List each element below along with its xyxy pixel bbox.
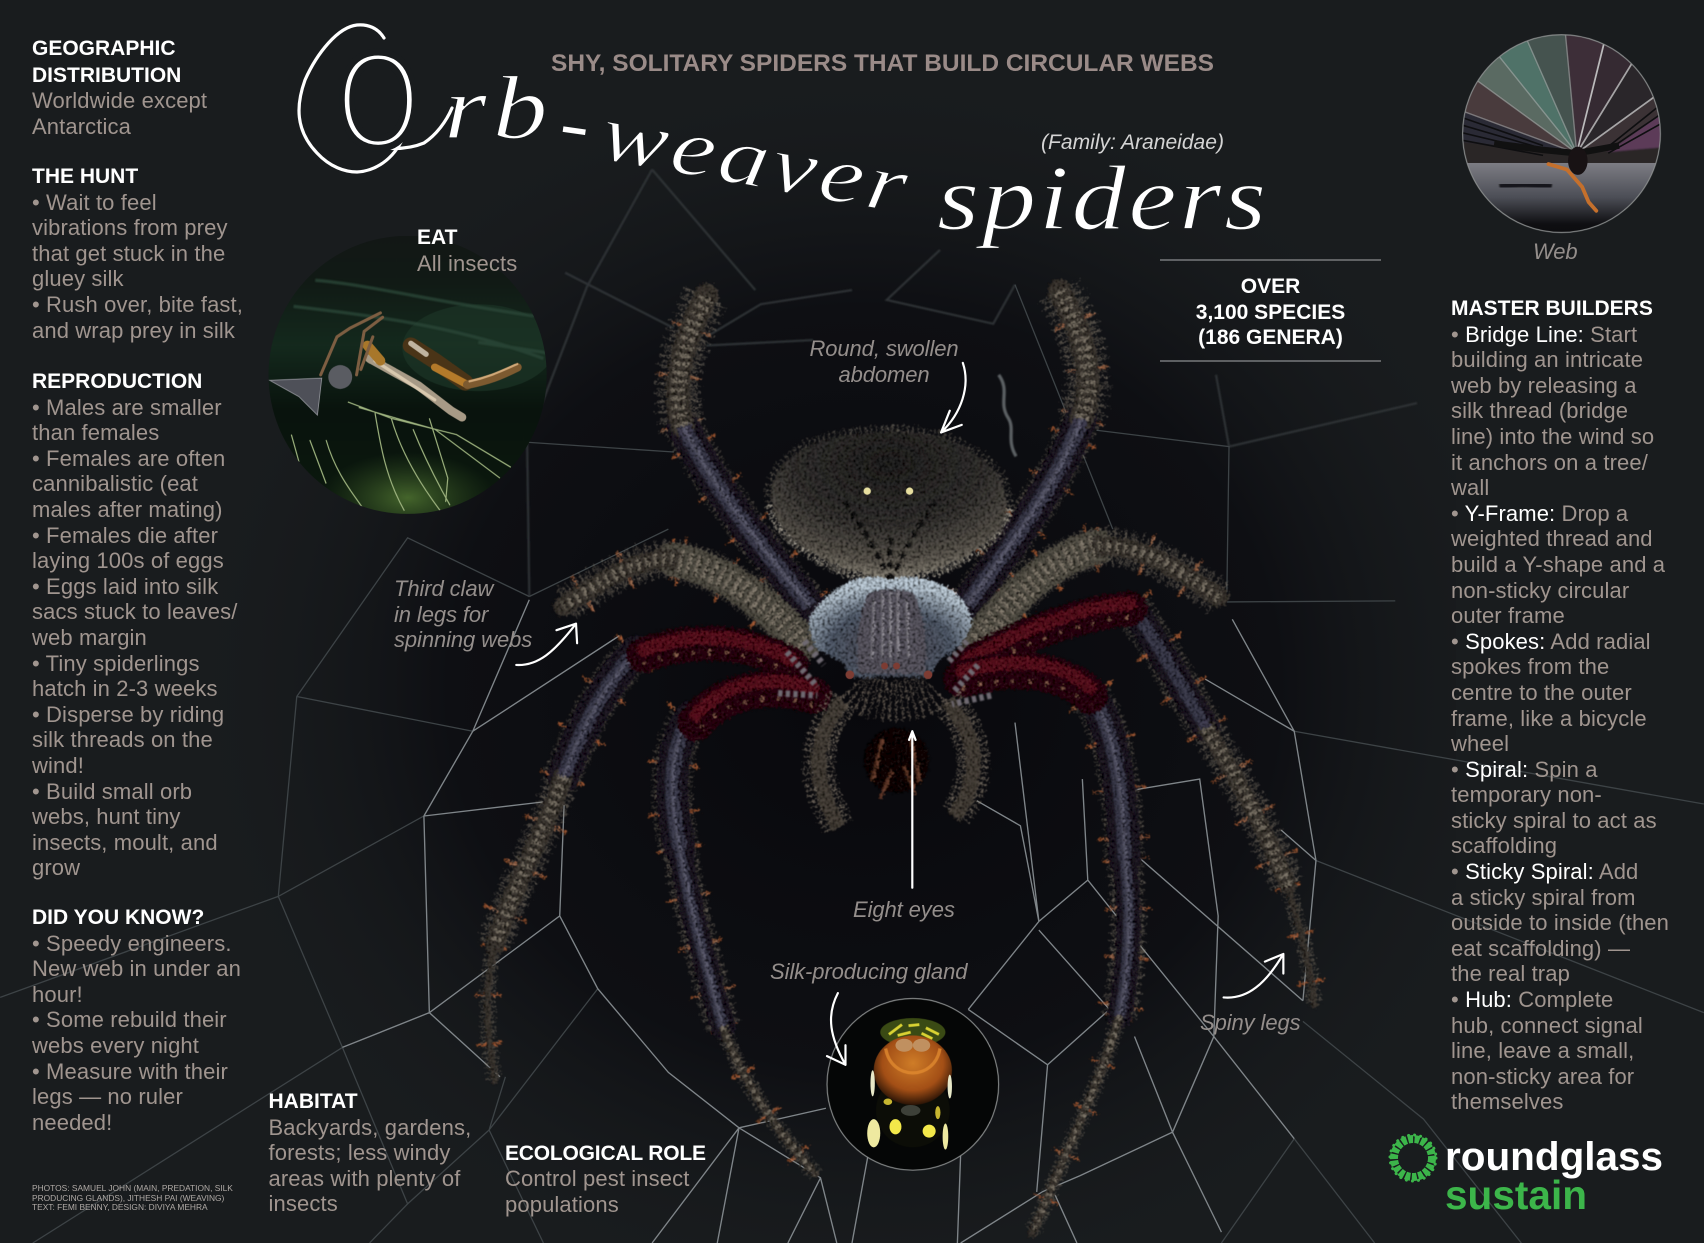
text: master builders: weighted thread and bbox=[1451, 526, 1653, 551]
text: did you know: DID YOU KNOW? bbox=[32, 906, 204, 929]
inset photo: web bbox=[1463, 35, 1660, 232]
text: master builders: a sticky spiral from bbox=[1451, 885, 1636, 910]
text: reproduction: males after mating) bbox=[32, 497, 223, 522]
caption: abdomen: abdomen bbox=[838, 362, 930, 387]
text: master builders: web by releasing a bbox=[1451, 373, 1637, 398]
text: reproduction: • Eggs laid into silk bbox=[32, 574, 218, 599]
abdomen bbox=[770, 432, 1007, 580]
text: master builders: sticky spiral to act as bbox=[1451, 808, 1657, 833]
text: credits bbox=[32, 1183, 233, 1212]
text: reproduction: REPRODUCTION bbox=[32, 370, 202, 393]
text: master builders: line, leave a small, bbox=[1451, 1038, 1634, 1063]
logo: roundglass sustain: roundglass bbox=[1445, 1135, 1663, 1179]
insect prey and spider bbox=[270, 313, 517, 417]
arrow: spiny legs bbox=[1224, 954, 1283, 998]
text: reproduction: • Females die after bbox=[32, 523, 218, 548]
text: geographic distribution: GEOGRAPHIC bbox=[32, 37, 176, 60]
text: master builders: building an intricate bbox=[1451, 347, 1643, 372]
text: species count: (186 GENERA) bbox=[1198, 326, 1343, 349]
text: master builders: hub, connect signal bbox=[1451, 1013, 1643, 1038]
inset photo: silk-producing gland bbox=[827, 999, 999, 1170]
front eyes bbox=[845, 663, 932, 679]
text: geographic distribution: Worldwide except bbox=[32, 88, 207, 113]
text: ecological role: Control pest insect bbox=[505, 1166, 689, 1191]
caption: third claw: Third claw bbox=[394, 576, 493, 601]
species count rules bbox=[1160, 260, 1381, 361]
text: master builders: it anchors on a tree/ bbox=[1451, 450, 1648, 475]
text: master builders: centre to the outer bbox=[1451, 680, 1632, 705]
text: reproduction: • Females are often bbox=[32, 446, 225, 471]
text: credits: PRODUCING GLANDS), JITHESH PAI (WEAVING) bbox=[32, 1193, 224, 1203]
spider bbox=[488, 291, 1315, 1233]
leg joints bbox=[778, 641, 991, 704]
text: master builders: eat scaffolding) — bbox=[1451, 936, 1630, 961]
text: did you know: webs every night bbox=[32, 1033, 199, 1058]
caption: abdomen bbox=[809, 336, 959, 387]
abdomen eye-spots bbox=[864, 487, 913, 495]
title: Orb-weaver spiders: weaver bbox=[595, 86, 915, 231]
text: reproduction: laying 100s of eggs bbox=[32, 548, 224, 573]
palps and fangs bbox=[819, 687, 974, 828]
text: master builders: wheel bbox=[1451, 731, 1509, 756]
text: reproduction: wind! bbox=[32, 753, 84, 778]
text: eat: EAT bbox=[417, 226, 457, 249]
logo: roundglass sustain bbox=[1390, 1135, 1663, 1218]
text: reproduction: • Tiny spiderlings bbox=[32, 651, 200, 676]
text: master builders: line) into the wind so bbox=[1451, 424, 1654, 449]
text: eat: All insects bbox=[417, 251, 517, 276]
arrow: silk gland bbox=[827, 993, 845, 1065]
text: habitat: HABITAT bbox=[268, 1090, 358, 1113]
text: reproduction: • Build small orb bbox=[32, 778, 192, 804]
text: reproduction: cannibalistic (eat bbox=[32, 471, 198, 496]
text: reproduction: than females bbox=[32, 420, 159, 445]
family name: (Family: Araneidae) bbox=[1041, 131, 1224, 154]
arrow: eight eyes bbox=[909, 731, 916, 888]
text: master builders: • Y-Frame: Drop a bbox=[1451, 501, 1628, 526]
logo ring bbox=[1390, 1135, 1436, 1181]
text: master builders: the real trap bbox=[1451, 961, 1570, 986]
text: habitat: forests; less windy bbox=[268, 1140, 451, 1165]
text: ecological role: populations bbox=[505, 1192, 619, 1217]
text: the hunt: gluey silk bbox=[32, 266, 124, 291]
text: master builders: MASTER BUILDERS bbox=[1451, 297, 1653, 320]
text: master builders: • Spokes: Add radial bbox=[1451, 629, 1651, 654]
text: master builders: outside to inside (then bbox=[1451, 910, 1669, 935]
title: Orb-weaver spiders bbox=[299, 24, 1266, 249]
text: reproduction: • Males are smaller bbox=[32, 395, 222, 420]
text: reproduction: silk threads on the bbox=[32, 727, 213, 752]
text: reproduction: hatch in 2-3 weeks bbox=[32, 676, 218, 701]
text: geographic distribution: Antarctica bbox=[32, 114, 131, 139]
text: reproduction: webs, hunt tiny bbox=[32, 804, 181, 829]
prey web strands bbox=[291, 402, 511, 511]
title: Orb-weaver spiders: - bbox=[553, 69, 598, 174]
text: master builders: non-sticky area for bbox=[1451, 1064, 1634, 1089]
text: eat bbox=[417, 226, 517, 276]
text: the hunt: • Wait to feel bbox=[32, 190, 157, 215]
caption: third claw: in legs for bbox=[394, 602, 488, 627]
text: the hunt: and wrap prey in silk bbox=[32, 318, 235, 343]
text: the hunt: • Rush over, bite fast, bbox=[32, 292, 243, 317]
text: master builders: spokes from the bbox=[1451, 654, 1609, 679]
text: credits: PHOTOS: SAMUEL JOHN (MAIN, PREDATION, SILK bbox=[32, 1183, 233, 1193]
caption: third claw: spinning webs bbox=[394, 627, 532, 652]
subtitle: SHY, SOLITARY SPIDERS THAT BUILD CIRCULAR WEBS bbox=[551, 50, 1214, 77]
text: reproduction: sacs stuck to leaves/ bbox=[32, 599, 238, 624]
arrow: third claw bbox=[516, 624, 577, 665]
caption: eight eyes: Eight eyes bbox=[853, 897, 955, 922]
text: the hunt: that get stuck in the bbox=[32, 241, 225, 266]
text: did you know: • Some rebuild their bbox=[32, 1007, 227, 1032]
text: reproduction: grow bbox=[32, 855, 80, 880]
title: Orb-weaver spiders: O bbox=[337, 24, 420, 176]
text: master builders: build a Y-shape and a bbox=[1451, 552, 1665, 577]
arrow: abdomen bbox=[941, 363, 966, 432]
inset photo: predation bbox=[268, 236, 546, 514]
text: the hunt bbox=[32, 165, 243, 343]
text: reproduction: insects, moult, and bbox=[32, 830, 218, 855]
spider legs bbox=[488, 291, 1315, 1233]
text: habitat: areas with plenty of bbox=[268, 1166, 460, 1191]
text: master builders: • Spiral: Spin a bbox=[1451, 757, 1598, 782]
text: did you know bbox=[32, 906, 241, 1135]
text: master builders: non-sticky circular bbox=[1451, 578, 1629, 603]
text: reproduction: web margin bbox=[32, 625, 147, 650]
text: master builders: temporary non- bbox=[1451, 782, 1602, 807]
text: the hunt: vibrations from prey bbox=[32, 215, 228, 240]
text: species count: 3,100 SPECIES bbox=[1196, 301, 1345, 324]
caption: silk gland: Silk-producing gland bbox=[770, 959, 967, 984]
text: did you know: needed! bbox=[32, 1110, 112, 1135]
text: the hunt: THE HUNT bbox=[32, 165, 138, 188]
caption: web: Web bbox=[1533, 239, 1578, 264]
text: master builders: silk thread (bridge bbox=[1451, 398, 1628, 423]
text: credits: TEXT: FEMI BENNY, DESIGN: DIVIYA MEHRA bbox=[32, 1202, 208, 1212]
text: master builders: • Sticky Spiral: Add bbox=[1451, 859, 1638, 884]
text: species count: OVER bbox=[1241, 275, 1300, 298]
text: master builders: wall bbox=[1451, 475, 1489, 500]
caption: abdomen: Round, swollen bbox=[809, 336, 959, 361]
text: did you know: legs — no ruler bbox=[32, 1084, 183, 1109]
text: ecological role: ECOLOGICAL ROLE bbox=[505, 1142, 706, 1164]
text: did you know: hour! bbox=[32, 982, 83, 1007]
text: reproduction bbox=[32, 370, 238, 880]
text: master builders: scaffolding bbox=[1451, 833, 1557, 858]
text: did you know: • Speedy engineers. bbox=[32, 931, 232, 956]
text: geographic distribution bbox=[32, 37, 207, 139]
text: habitat: Backyards, gardens, bbox=[268, 1115, 471, 1140]
text: master builders: outer frame bbox=[1451, 603, 1565, 628]
text: master builders: frame, like a bicycle bbox=[1451, 706, 1647, 730]
caption: spiny legs: Spiny legs bbox=[1200, 1010, 1301, 1035]
text: master builders: • Hub: Complete bbox=[1451, 987, 1613, 1012]
text: master builders: themselves bbox=[1451, 1089, 1563, 1114]
text: habitat: insects bbox=[268, 1191, 338, 1216]
caption: third claw bbox=[394, 576, 532, 652]
title: Orb-weaver spiders: spiders bbox=[937, 147, 1266, 249]
text: geographic distribution: DISTRIBUTION bbox=[32, 64, 181, 87]
text: ecological role bbox=[505, 1142, 706, 1217]
text: did you know: • Measure with their bbox=[32, 1059, 228, 1084]
text: reproduction: • Disperse by riding bbox=[32, 702, 224, 727]
logo: roundglass sustain: sustain bbox=[1445, 1172, 1587, 1218]
text: habitat bbox=[268, 1090, 471, 1216]
text: master builders bbox=[1451, 297, 1669, 1114]
text: master builders: • Bridge Line: Start bbox=[1451, 322, 1637, 347]
cephalothorax bbox=[809, 577, 972, 677]
text: species count bbox=[1196, 275, 1345, 349]
title: Orb-weaver spiders: rb bbox=[444, 58, 548, 158]
text: did you know: New web in under an bbox=[32, 956, 241, 981]
